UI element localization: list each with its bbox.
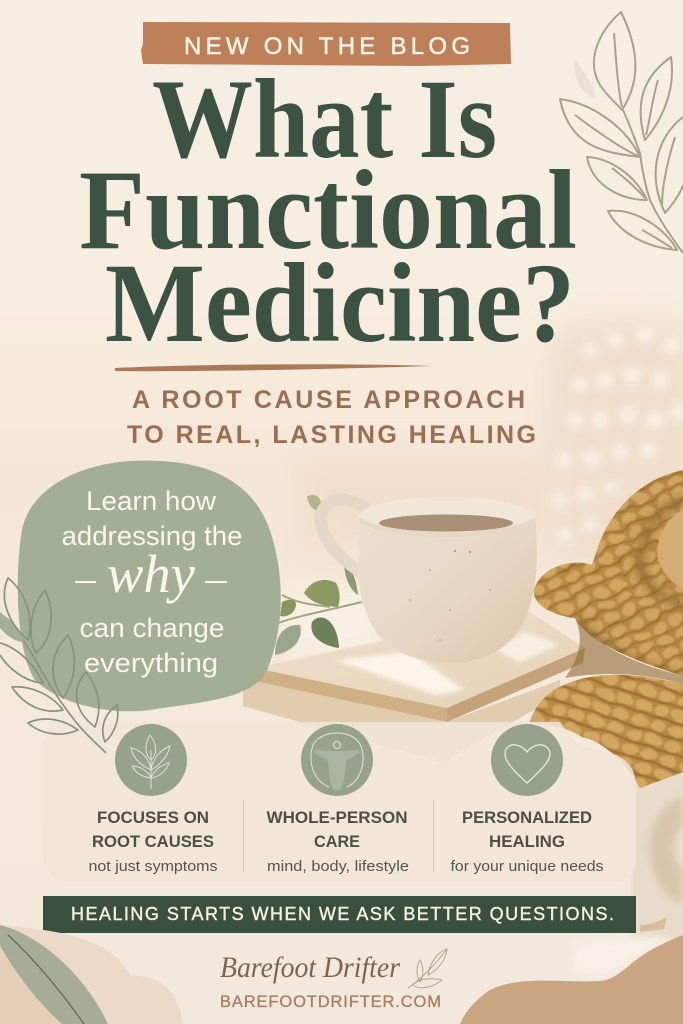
signature: Barefoot Drifter <box>220 951 400 984</box>
signature sprig <box>408 949 447 988</box>
mug handle <box>321 499 364 572</box>
blog banner <box>141 22 511 66</box>
mug rim <box>359 497 535 535</box>
bottom left tan blobs <box>0 925 182 1024</box>
callout text: why: why <box>107 544 195 604</box>
benefit: personalized healing <box>450 809 604 875</box>
benefit: personalized healing: for your unique needs <box>450 859 604 875</box>
benefit: root causes: FOCUSES ON <box>97 809 209 827</box>
green leaf sprig beside mug <box>272 495 362 655</box>
callout dash left <box>75 581 96 583</box>
website: BAREFOOTDRIFTER.COM <box>220 993 441 1011</box>
top right botanical branch <box>560 12 683 253</box>
benefit: root causes: ROOT CAUSES <box>92 833 214 851</box>
callout dash right <box>205 581 227 583</box>
title: Functional <box>79 148 577 273</box>
callout text: learn how: Learn how <box>86 486 217 516</box>
tagline text: HEALING STARTS WHEN WE ASK BETTER QUESTIONS. <box>71 904 614 924</box>
callout text: everything: everything <box>84 648 218 678</box>
macrame blur texture <box>550 320 683 570</box>
icon: plant <box>115 724 187 796</box>
brush underline <box>115 364 432 371</box>
sage callout blob <box>18 461 281 711</box>
left botanical sprig <box>0 578 118 753</box>
shadow between folds <box>565 618 683 684</box>
subtitle: TO REAL, LASTING HEALING <box>127 421 536 449</box>
pale blanket, lower right <box>572 765 683 976</box>
mug speckles <box>409 550 491 641</box>
mug body <box>357 503 537 663</box>
benefit: whole-person care: WHOLE-PERSON <box>266 809 408 827</box>
benefit: personalized healing: HEALING <box>489 833 565 851</box>
benefit: root causes <box>88 809 218 875</box>
tagline bar <box>43 896 636 933</box>
sweater inner fold <box>657 510 683 588</box>
benefit: whole-person care: mind, body, lifestyle <box>267 859 409 875</box>
tea <box>379 514 513 532</box>
bottom left sage leaf <box>0 925 108 1024</box>
benefit: personalized healing: PERSONALIZED <box>462 809 592 827</box>
benefit: whole-person care: CARE <box>314 833 360 851</box>
photo backdrop: window light and curtain <box>285 460 550 650</box>
stacked books <box>243 610 585 762</box>
benefit: root causes: not just symptoms <box>88 859 218 875</box>
title: Medicine? <box>105 241 575 366</box>
benefit: whole-person care <box>266 809 409 875</box>
mustard knit sweater <box>530 470 683 788</box>
bottom right brown blob <box>460 935 683 1024</box>
banner text: NEW ON THE BLOG <box>184 33 470 60</box>
callout text: addressing the: addressing the <box>62 521 242 551</box>
coffee mug <box>321 497 537 663</box>
icon: heart <box>491 724 563 796</box>
icon: whole person <box>301 724 373 796</box>
subtitle <box>127 386 536 449</box>
subtitle: A ROOT CAUSE APPROACH <box>132 386 525 414</box>
faint leaf <box>574 60 595 98</box>
title: What Is <box>152 57 497 182</box>
translucent benefits panel <box>43 722 636 882</box>
callout text: can change: can change <box>80 613 224 643</box>
title <box>79 57 577 366</box>
